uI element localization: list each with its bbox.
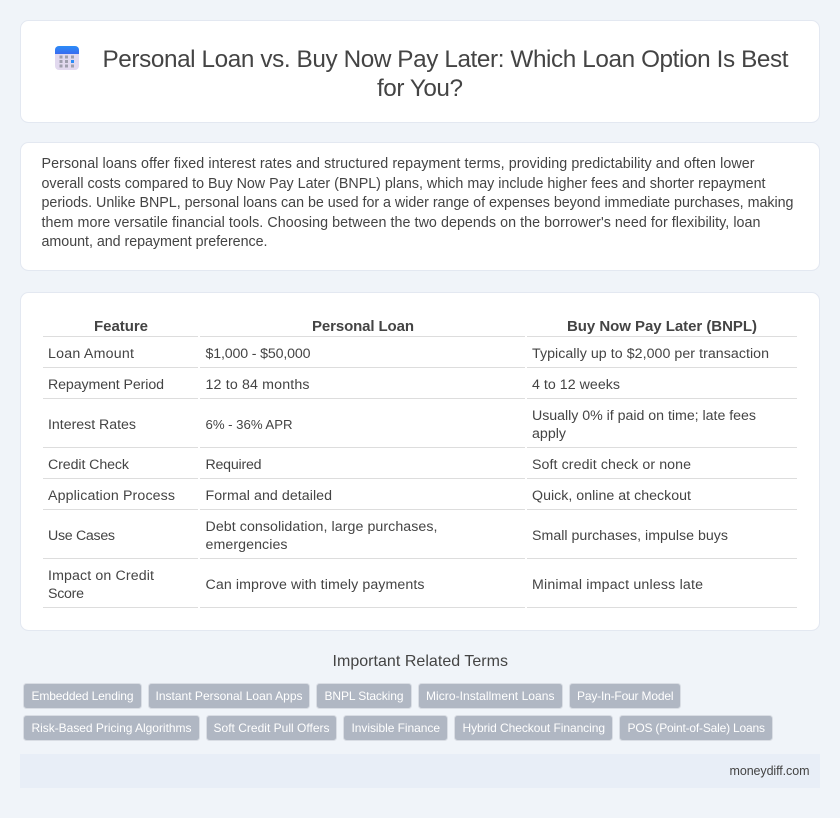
footer	[20, 754, 820, 788]
tag: risk-based pricing algorithms: Risk-Based Pricing Algorithms	[32, 721, 192, 735]
row: use cases: emergencies	[206, 537, 288, 553]
row: use cases	[43, 519, 797, 559]
row: credit check	[43, 457, 797, 479]
row: credit check: Credit Check	[48, 457, 130, 473]
heading: important related terms: Important Related Terms	[332, 653, 508, 670]
row: repayment period: 12 to 84 months	[206, 377, 310, 393]
text block: summary	[42, 156, 794, 250]
tag: micro-installment loans	[418, 684, 562, 708]
row: use cases: Use Cases	[48, 528, 115, 544]
tag: invisible finance: Invisible Finance	[352, 721, 440, 735]
tag: micro-installment loans: Micro-Installment Loans	[426, 689, 554, 703]
tag: embedded lending	[24, 684, 142, 708]
row: interest rates: apply	[532, 426, 567, 442]
row: impact on credit score: Can improve with timely payments	[206, 577, 424, 593]
row: loan amount: $1,000 - $50,000	[206, 346, 311, 362]
table header row: Personal Loan	[312, 318, 414, 335]
row: credit check: Required	[206, 457, 262, 473]
tag: risk-based pricing algorithms	[24, 716, 200, 740]
tag: soft credit pull offers	[206, 716, 336, 740]
row: interest rates: Usually 0% if paid on time; late fees	[532, 408, 756, 424]
row: loan amount: Loan Amount	[48, 346, 134, 362]
row: interest rates: 6% - 36% APR	[206, 417, 292, 432]
tag: bnpl stacking	[316, 684, 412, 708]
tag: hybrid checkout financing: Hybrid Checkout Financing	[462, 721, 605, 735]
row: repayment period: Repayment Period	[48, 377, 164, 393]
tag: embedded lending: Embedded Lending	[32, 689, 134, 703]
tag: pay-in-four model: Pay-In-Four Model	[577, 689, 674, 703]
row: application process: Application Process	[48, 488, 175, 504]
row: repayment period: 4 to 12 weeks	[532, 377, 620, 393]
tag: pay-in-four model	[570, 684, 680, 708]
row: impact on credit score: Score	[48, 586, 84, 602]
table header row	[43, 318, 797, 337]
row: use cases: Small purchases, impulse buys	[532, 528, 728, 544]
row: application process: Quick, online at checkout	[532, 488, 691, 504]
tag: invisible finance	[344, 716, 448, 740]
text block: summary: them more versatile financial tools. Choosing between the two depends on the borrower's need for flexibility, loan	[42, 215, 761, 231]
panel: header	[20, 20, 820, 122]
table header row: Buy Now Pay Later (BNPL)	[567, 318, 757, 335]
text block: summary: overall costs compared to Buy Now Pay Later (BNPL) plans, which may include higher fees and shorter repayment	[42, 176, 766, 192]
tag: pos loans: POS (Point-of-Sale) Loans	[628, 721, 765, 735]
row: application process	[43, 488, 797, 510]
row: impact on credit score: Impact on Credit	[48, 568, 154, 584]
text block: summary: periods. Unlike BNPL, personal loans can be used for a wider range of expenses beyond immediate purchases, making	[42, 195, 794, 211]
row: loan amount: Typically up to $2,000 per transaction	[532, 346, 769, 362]
panel: summary paragraph	[20, 142, 820, 270]
row: use cases: Debt consolidation, large purchases,	[206, 519, 438, 535]
table header row: Feature	[94, 318, 148, 335]
title: Personal Loan vs. Buy Now Pay Later: Which Loan Option Is Best	[102, 46, 789, 73]
tag: pos loans	[620, 716, 772, 740]
row: loan amount	[43, 346, 797, 368]
row: interest rates	[43, 408, 797, 448]
footer: moneydiff.com	[730, 764, 810, 778]
tag: soft credit pull offers: Soft Credit Pull Offers	[214, 721, 330, 735]
tag: instant personal loan apps: Instant Personal Loan Apps	[156, 689, 302, 703]
row: interest rates: Interest Rates	[48, 417, 136, 433]
title	[102, 46, 789, 102]
tag list: related terms	[24, 684, 772, 740]
row: repayment period	[43, 377, 797, 399]
text block: summary: Personal loans offer fixed interest rates and structured repayment terms, providing predictability and often lower	[42, 156, 755, 172]
tag: instant personal loan apps	[148, 684, 310, 708]
tag: hybrid checkout financing	[454, 716, 612, 740]
title: for You?	[377, 75, 463, 102]
row: impact on credit score: Minimal impact unless late	[532, 577, 703, 593]
row: credit check: Soft credit check or none	[532, 457, 691, 473]
tag: bnpl stacking: BNPL Stacking	[324, 689, 404, 703]
panel: comparison table	[20, 292, 820, 630]
row: impact on credit score	[43, 568, 797, 608]
text block: summary: amount, and repayment preference.	[42, 234, 268, 250]
icon: calendar	[55, 46, 79, 70]
row: application process: Formal and detailed	[206, 488, 332, 504]
